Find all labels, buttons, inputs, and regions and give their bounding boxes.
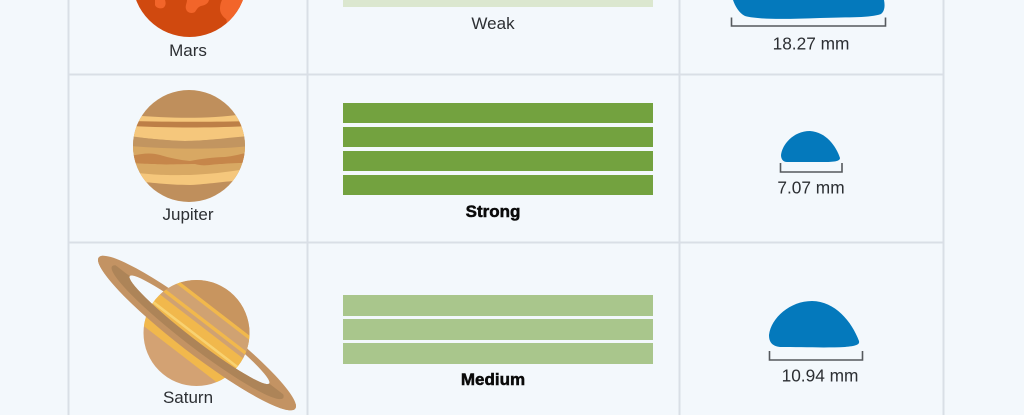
bracket: 7.07 mm — [780, 163, 842, 172]
icon: Jupiter planet — [133, 90, 245, 202]
icon: droplet 7.07 mm — [781, 131, 840, 162]
ring: front half — [98, 256, 296, 410]
row: Jupiter — [130, 85, 845, 224]
row: Mars — [130, 0, 886, 60]
label: Strong: Strong — [466, 202, 520, 221]
label: 10.94 mm: 10.94 mm — [782, 366, 858, 386]
icon: Saturn planet with rings — [98, 256, 296, 410]
icon: droplet 10.94 mm — [769, 301, 859, 347]
bar: weak — [343, 0, 653, 7]
label: Medium: Medium — [461, 370, 525, 389]
planet body — [144, 280, 250, 386]
ring: back half — [87, 241, 307, 415]
bracket: 18.27 mm — [732, 18, 886, 26]
label: 18.27 mm: 18.27 mm — [773, 34, 849, 54]
row: Saturn — [98, 256, 864, 410]
label: 7.07 mm: 7.07 mm — [777, 178, 845, 198]
icon: Mars planet — [136, 0, 243, 37]
ring: dark inner band — [112, 265, 284, 399]
bars: strong — [343, 103, 653, 195]
icon: droplet 18.27 mm — [733, 0, 885, 19]
label: Mars: Mars — [169, 41, 207, 60]
bars: medium — [343, 295, 653, 364]
label: Weak: Weak — [471, 14, 515, 33]
label: Saturn: Saturn — [163, 388, 213, 407]
bracket: 10.94 mm — [770, 351, 862, 360]
label: Jupiter: Jupiter — [162, 205, 214, 224]
